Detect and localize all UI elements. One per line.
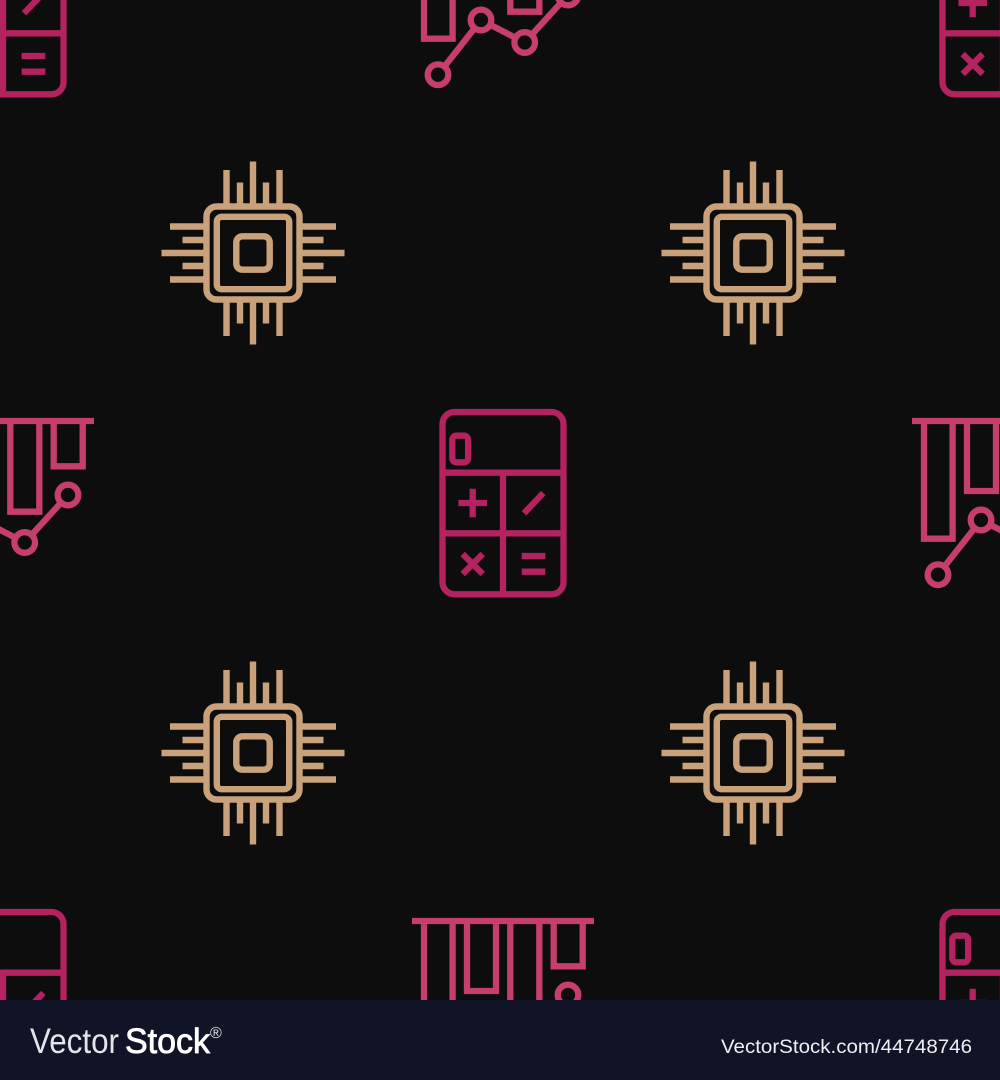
brand logo: Vector — [30, 1022, 119, 1061]
brand logo — [30, 1022, 222, 1061]
icon: bar and line chart cropped left — [0, 421, 94, 585]
icon: microchip bottom right — [662, 662, 844, 844]
icon: bar and line chart cropped top — [412, 0, 594, 85]
icon: bar and line chart cropped bottom — [412, 921, 594, 1080]
icon: calculator cropped bottom right — [942, 912, 1000, 1080]
icon: microchip top left — [162, 162, 344, 344]
brand logo: Stock — [125, 1022, 210, 1061]
footer band — [0, 1000, 1000, 1080]
icon: bar and line chart cropped right — [912, 421, 1000, 585]
icon: microchip top right — [662, 162, 844, 344]
icon: calculator cropped top right — [942, 0, 1000, 94]
brand logo: ® — [210, 1025, 222, 1042]
image id url: VectorStock.com/44748746 — [721, 1036, 972, 1058]
icon: calculator center — [442, 412, 564, 594]
icon: calculator cropped top left — [0, 0, 64, 94]
icon: microchip bottom left — [162, 662, 344, 844]
icon: calculator cropped bottom left — [0, 912, 64, 1080]
